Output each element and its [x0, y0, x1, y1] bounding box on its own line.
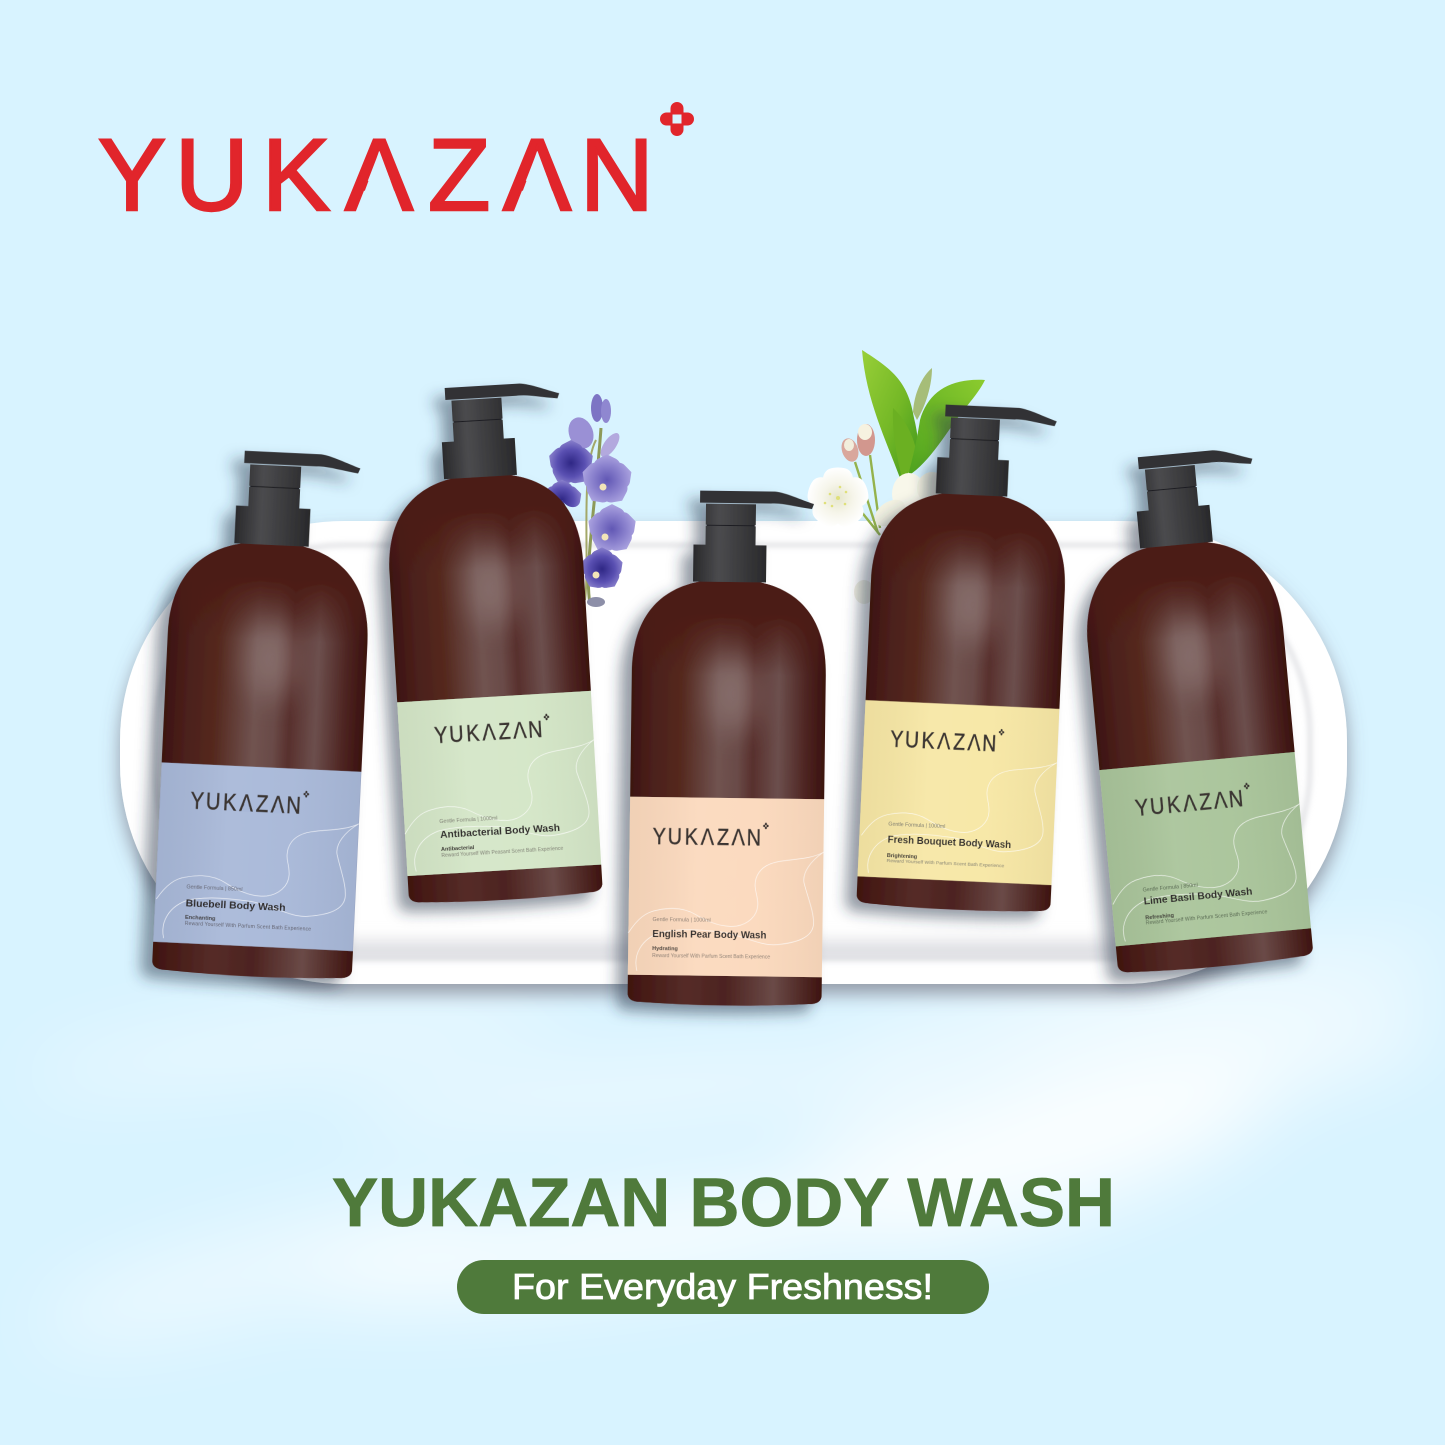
label: [628, 797, 824, 977]
label text: Gentle Formula | 1000ml: [439, 816, 498, 825]
buds: [564, 394, 623, 460]
label: Reward Yourself With Parfum Scent Bath Experience: [185, 921, 311, 933]
pump: [1132, 447, 1260, 548]
icon: green leaves and white blossoms: [152, 350, 1314, 1314]
label logo: YUKAZAN: [890, 726, 997, 757]
icon: red plus: [660, 102, 694, 136]
label: Antibacterial: [441, 845, 475, 853]
label text: Gentle Formula | 850ml: [186, 884, 243, 893]
big flower: [578, 454, 636, 509]
label: Lime Basil Body Wash: [1143, 887, 1253, 908]
pill tagline: For Everyday Freshness!: [512, 1266, 933, 1307]
icon: purple bluebell flowers: [539, 394, 640, 607]
label text: Gentle Formula | 1000ml: [888, 822, 945, 830]
label: Reward Yourself With Parfum Scent Bath Experience: [1146, 909, 1268, 926]
bottle: English Pear Body Wash: [627, 490, 828, 1007]
label: [858, 700, 1059, 885]
title: YUKAZAN BODY WASH: [332, 1164, 1115, 1241]
tray: [120, 521, 1347, 984]
bottle body: [627, 581, 827, 1007]
bottle body: [152, 540, 372, 981]
logo: [98, 102, 694, 232]
label: Antibacterial Body Wash: [440, 823, 560, 841]
label logo: YUKAZAN: [1134, 784, 1244, 821]
label logo: YUKAZAN: [652, 822, 761, 851]
pump: [693, 491, 814, 583]
logo crossbar masks: [357, 151, 560, 212]
pump: [234, 451, 361, 549]
label: Bluebell Body Wash: [185, 898, 286, 914]
bottle: Bluebell Body Wash: [152, 448, 376, 981]
label: English Pear Body Wash: [652, 929, 766, 942]
label: Fresh Bouquet Body Wash: [887, 834, 1011, 851]
label: Enchanting: [185, 915, 216, 922]
middle flower: [584, 504, 640, 557]
leaves: [862, 350, 985, 478]
bottle: Lime Basil Body Wash: [1071, 445, 1314, 976]
label: Hydrating: [652, 946, 678, 952]
bottle body: [384, 471, 603, 906]
label: [1099, 752, 1311, 946]
label: [397, 691, 601, 876]
label: Reward Yourself With Parfum Scent Bath Experience: [887, 858, 1005, 869]
pump: [936, 404, 1057, 499]
label: Reward Yourself With Parfum Scent Bath Experience: [652, 953, 770, 961]
dark flower: [545, 440, 597, 489]
pump: [439, 381, 564, 479]
bottle: Fresh Bouquet Body Wash: [856, 402, 1073, 914]
label: Reward Yourself With Peasant Scent Bath Experience: [441, 846, 564, 859]
logo wordmark: YUKAZAN: [98, 118, 654, 232]
label text: Gentle Formula | 1000ml: [653, 917, 711, 924]
label text: Gentle Formula | 850ml: [1143, 883, 1198, 894]
bottle: Antibacterial Body Wash: [379, 380, 603, 906]
label: [153, 762, 361, 951]
label logo: YUKAZAN: [433, 715, 543, 749]
blossoms: [804, 424, 947, 604]
bottle body: [856, 491, 1069, 914]
bottle body: [1079, 536, 1314, 976]
label logo: YUKAZAN: [190, 787, 302, 819]
left flower: [539, 480, 585, 523]
label: Brightening: [887, 853, 917, 860]
pill tagline: [457, 1260, 989, 1314]
lower flower: [578, 547, 626, 593]
label: Refreshing: [1145, 913, 1174, 922]
